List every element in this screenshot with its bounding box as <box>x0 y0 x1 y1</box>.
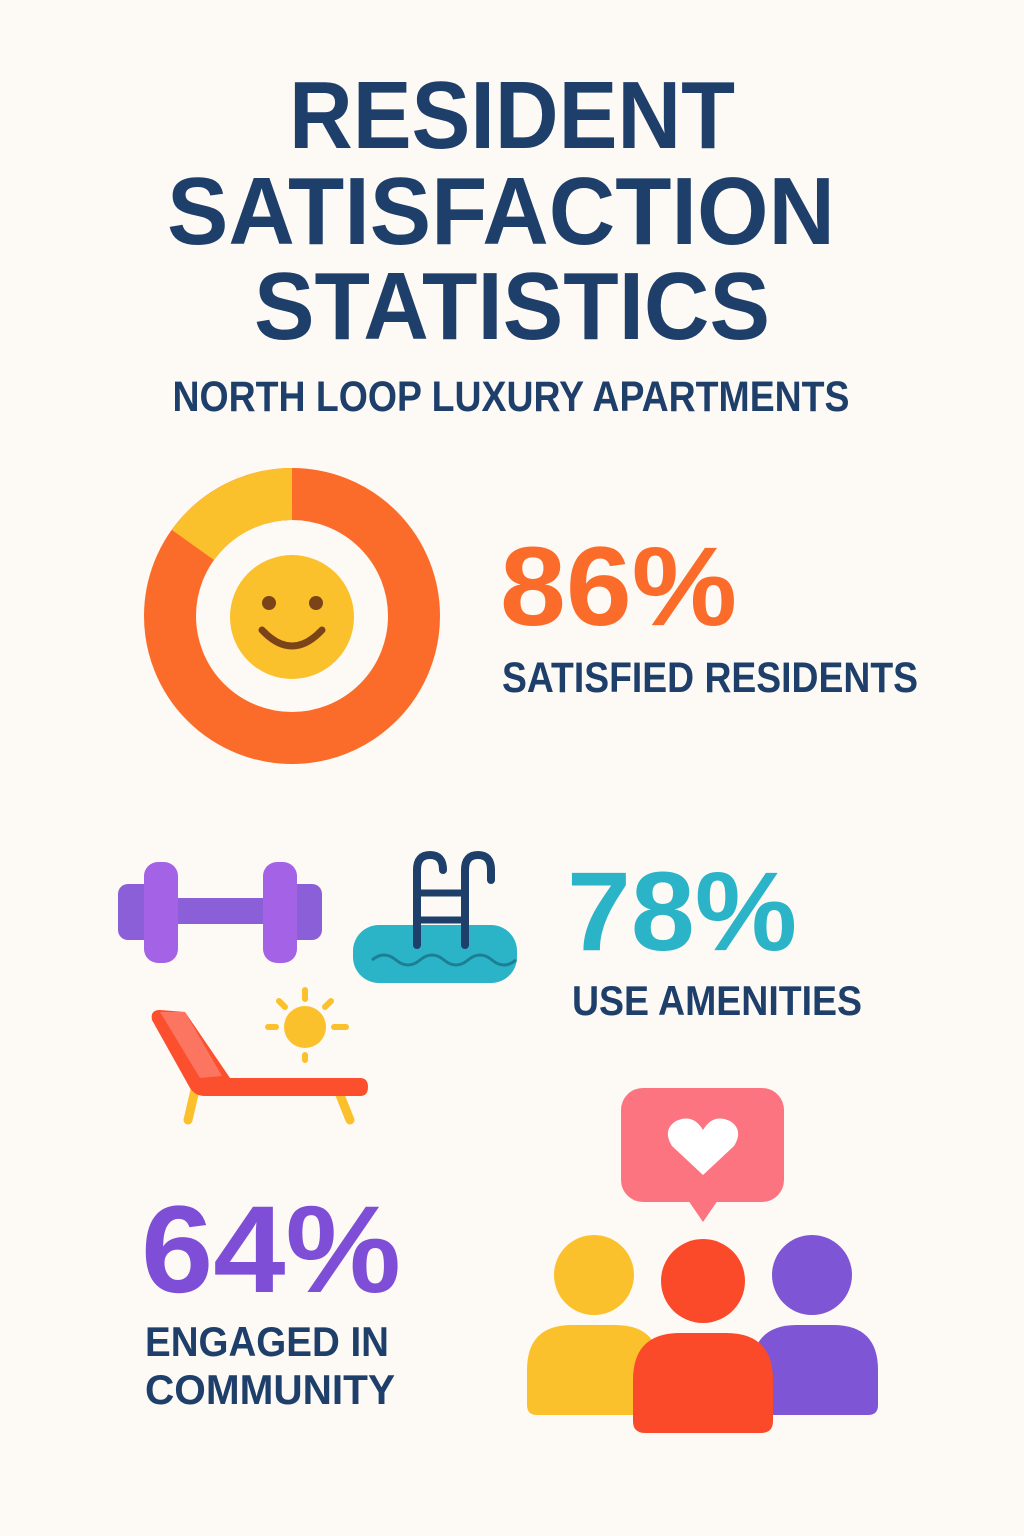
title: SATISFACTION <box>167 158 835 265</box>
stat: 64% engaged <box>141 1181 401 1413</box>
icon: smiley <box>230 555 354 679</box>
icon: pool <box>353 855 517 983</box>
stat: 86% satisfied: SATISFIED RESIDENTS <box>502 654 918 702</box>
stat: 64% engaged: COMMUNITY <box>145 1366 395 1413</box>
stat: 78% amenities: USE AMENITIES <box>572 977 862 1024</box>
stat: 64% engaged: ENGAGED IN <box>145 1318 389 1365</box>
stat: 86% satisfied <box>500 524 918 702</box>
icon: lounge chair and sun <box>152 990 368 1120</box>
icon: dumbbell <box>118 862 322 963</box>
stat: 78% amenities <box>567 849 862 1024</box>
title <box>167 62 835 360</box>
title: STATISTICS <box>254 253 770 360</box>
stat: 86% satisfied: 86% <box>500 524 737 649</box>
stat: 64% engaged: 64% <box>141 1181 401 1319</box>
title: RESIDENT <box>289 62 735 169</box>
subtitle: NORTH LOOP LUXURY APARTMENTS <box>172 373 850 421</box>
icon: community people with heart bubble <box>527 1088 878 1433</box>
speech bubble with heart <box>621 1088 784 1222</box>
donut chart: satisfaction <box>170 494 414 738</box>
stat: 78% amenities: 78% <box>567 849 797 974</box>
